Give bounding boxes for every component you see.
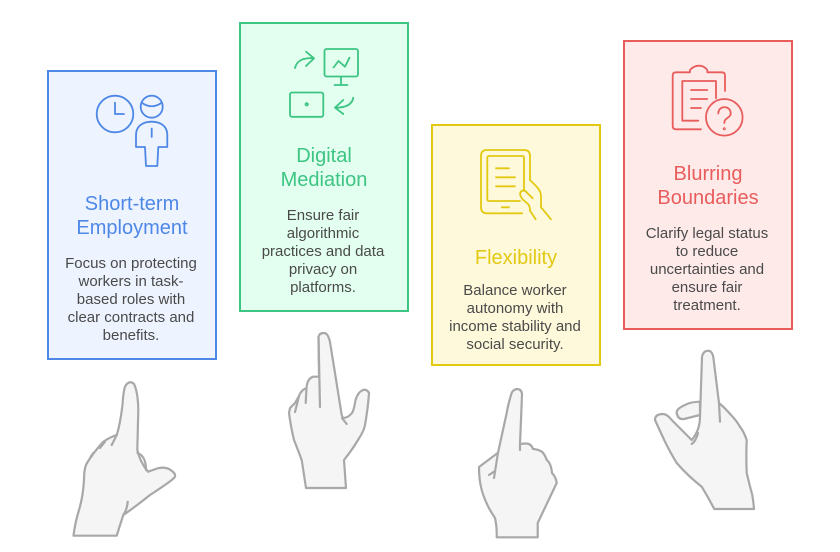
description: clear contracts and <box>68 309 194 326</box>
icon: hand holding tablet <box>481 150 551 219</box>
heading: Mediation <box>281 169 367 191</box>
icon: clock and worker <box>97 96 167 166</box>
hand: blue panel <box>74 382 175 536</box>
description: social security. <box>466 336 564 353</box>
hand: yellow panel <box>479 389 557 537</box>
card background <box>624 41 792 329</box>
panel: short-term employment <box>48 71 216 359</box>
description: Balance worker <box>463 282 567 299</box>
description: uncertainties and <box>650 261 764 278</box>
heading: Employment <box>76 217 188 239</box>
panel: blurring boundaries <box>624 41 792 329</box>
heading <box>657 163 759 209</box>
heading <box>281 145 367 191</box>
description: privacy on <box>289 261 357 278</box>
hand: red panel <box>655 351 754 509</box>
description: based roles with <box>77 291 185 308</box>
description <box>65 255 197 344</box>
description: platforms. <box>290 279 356 296</box>
description: algorithmic <box>287 225 360 242</box>
panel: flexibility <box>432 125 600 365</box>
description: income stability and <box>449 318 581 335</box>
description: ensure fair <box>672 279 742 296</box>
heading: Short-term <box>85 193 179 215</box>
heading: Digital <box>296 145 352 167</box>
heading: Flexibility <box>475 247 557 269</box>
heading: Boundaries <box>657 187 759 209</box>
card background <box>48 71 216 359</box>
heading <box>76 193 188 239</box>
description: Clarify legal status <box>646 225 768 242</box>
card background <box>240 23 408 311</box>
description: workers in task- <box>77 273 184 290</box>
description: autonomy with <box>467 300 563 317</box>
panel: digital mediation <box>240 23 408 311</box>
icon: clipboard with question mark <box>673 66 743 136</box>
description: Focus on protecting <box>65 255 197 272</box>
description: to reduce <box>676 243 738 260</box>
description: practices and data <box>262 243 385 260</box>
card background <box>432 125 600 365</box>
icon: devices and arrows <box>290 49 358 117</box>
hand: green panel <box>289 333 369 488</box>
description: benefits. <box>103 327 159 344</box>
description <box>646 225 768 314</box>
description: treatment. <box>673 297 741 314</box>
description <box>449 282 581 353</box>
description: Ensure fair <box>287 207 359 224</box>
heading: Blurring <box>674 163 742 185</box>
description <box>262 207 385 296</box>
